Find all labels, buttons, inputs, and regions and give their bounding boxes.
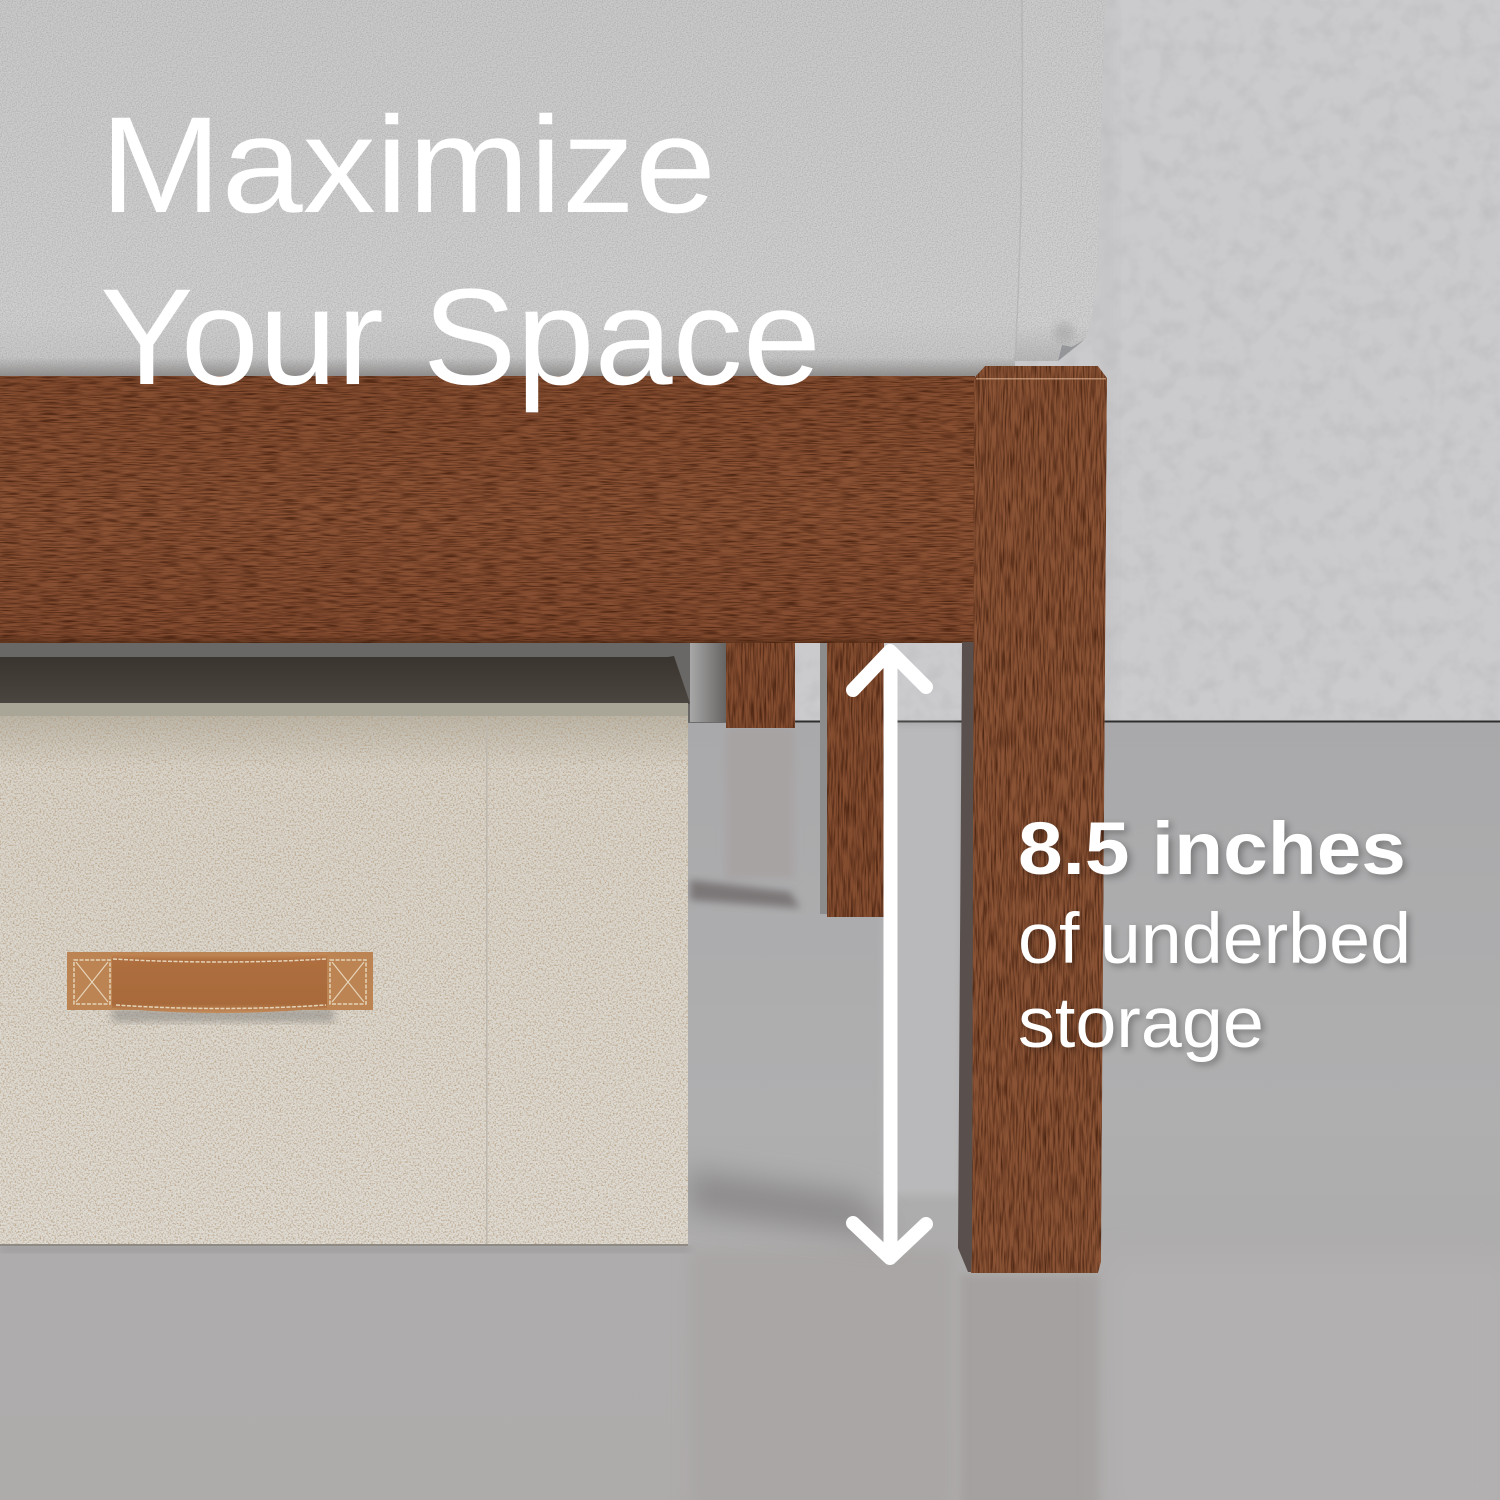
title: Maximize bbox=[100, 89, 716, 242]
back legs bbox=[726, 642, 884, 917]
callout: underbed storage: storage bbox=[1018, 984, 1264, 1063]
floor reflections bbox=[690, 725, 1500, 1500]
measurement arrow bbox=[853, 651, 926, 1258]
bed side rail bbox=[0, 376, 975, 643]
title: Your Space bbox=[100, 261, 821, 414]
front leg bbox=[958, 366, 1107, 1273]
floor bbox=[0, 720, 1500, 1500]
under-bed shadow bbox=[0, 642, 726, 722]
storage box bbox=[0, 656, 690, 1246]
box handle bbox=[67, 952, 373, 1022]
floor shadows bbox=[0, 880, 895, 1252]
wall bbox=[0, 0, 1500, 722]
callout: underbed storage: 8.5 inches bbox=[1018, 807, 1406, 890]
mattress bbox=[0, 0, 1105, 376]
title bbox=[100, 89, 821, 414]
callout: underbed storage bbox=[1018, 807, 1412, 1068]
callout: underbed storage: of underbed bbox=[1018, 900, 1411, 979]
